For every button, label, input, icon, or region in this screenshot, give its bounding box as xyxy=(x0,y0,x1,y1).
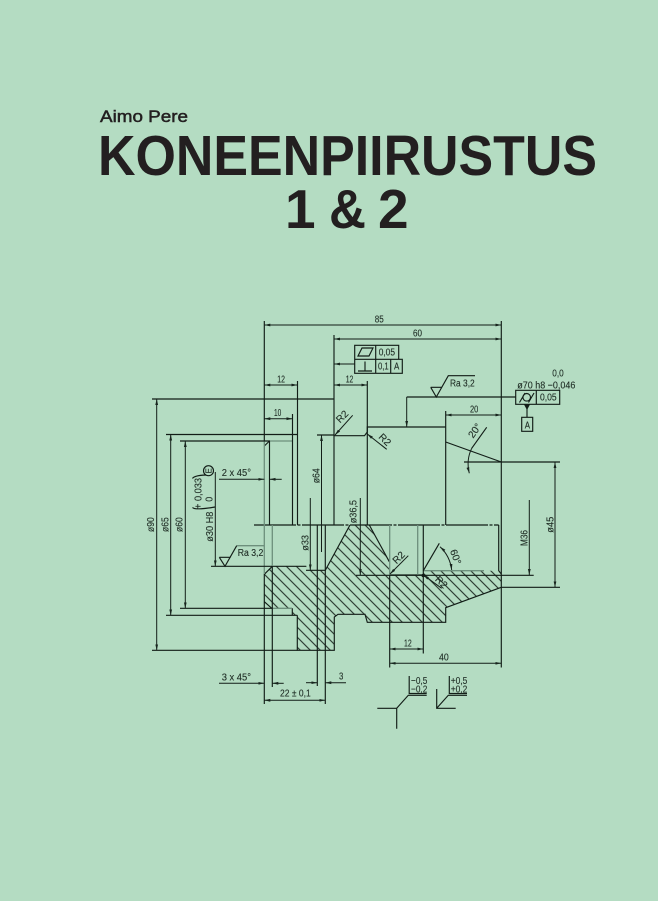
angled radius and angle labels: R2 xyxy=(334,409,351,426)
subtitle: 1 & 2 xyxy=(285,178,409,240)
horizontal dimension labels: 60 xyxy=(413,329,422,340)
horizontal dimension labels: 40 xyxy=(439,653,449,664)
edge symbol left xyxy=(377,675,427,729)
horizontal dimension labels: 85 xyxy=(375,315,384,326)
angled radius and angle labels: R2 xyxy=(432,574,449,591)
horizontal dimension labels: 2 x 45° xyxy=(222,468,251,479)
edge symbol left: −0,5 xyxy=(411,675,427,687)
edge symbol right: +0,2 xyxy=(451,684,467,696)
vertical dimension labels xyxy=(146,468,556,551)
radius and angle leaders xyxy=(335,415,487,588)
cylindricity frame with datum A xyxy=(516,369,576,431)
flatness and perpendicularity frame: 0,1 xyxy=(378,362,389,373)
cylindricity frame with datum A: 0,0 xyxy=(552,369,564,380)
cylindricity frame with datum A: 0,05 xyxy=(540,392,557,403)
horizontal dimension labels: 12 xyxy=(404,639,412,650)
surface symbol Ra 3,2 lower: Ra 3,2 xyxy=(238,548,264,559)
horizontal dimension labels: 22 ± 0,1 xyxy=(280,689,311,700)
horizontal dimension labels: 12 xyxy=(277,375,285,386)
author name: Aimo Pere xyxy=(100,107,188,126)
vertical dimension labels: ø90 xyxy=(146,517,157,532)
tolerance bracket and envelope symbol xyxy=(192,466,215,509)
title: KONEENPIIRUSTUS xyxy=(98,124,597,187)
extension lines xyxy=(152,321,560,704)
angled radius and angle labels: R2 xyxy=(376,432,393,449)
horizontal dimension labels xyxy=(222,315,479,700)
edge symbol left: −0,2 xyxy=(411,684,427,696)
vertical dimension labels: 0 xyxy=(204,496,216,502)
flatness and perpendicularity frame: 0,05 xyxy=(379,347,395,358)
flatness and perpendicularity frame xyxy=(355,345,402,373)
horizontal dimension labels: 3 x 45° xyxy=(222,672,251,683)
technical drawing xyxy=(146,315,576,729)
vertical dimension labels: ø65 xyxy=(160,517,172,532)
edge symbol right: +0,5 xyxy=(451,675,467,687)
angled radius and angle labels: R2 xyxy=(391,550,408,567)
vertical dimension labels: ø30 H8 xyxy=(205,511,216,542)
angled radius and angle labels: 20° xyxy=(467,422,484,440)
vertical dimension labels: ø45 xyxy=(545,516,556,533)
horizontal dimension labels: 20 xyxy=(470,405,479,416)
hidden / grey edge lines xyxy=(237,441,484,608)
vertical dimension labels: ø60 xyxy=(175,517,186,532)
angled radius and angle labels: 60° xyxy=(447,548,463,566)
dimension lines xyxy=(157,325,555,700)
hatched section of the part xyxy=(264,525,501,650)
subtitle: 1 & 2: 2 xyxy=(378,178,409,240)
vertical dimension labels: ø64 xyxy=(311,468,322,483)
subtitle: 1 & 2: 1 xyxy=(285,178,316,240)
part outline xyxy=(254,427,501,650)
vertical dimension labels: ø36,5 xyxy=(349,500,360,523)
cylindricity frame with datum A: A xyxy=(525,420,530,431)
edge symbol right xyxy=(437,675,467,708)
vertical dimension labels: + 0,033 xyxy=(194,478,204,509)
cylindricity frame with datum A: ø70 h8 −0,046 xyxy=(517,381,576,392)
tolerance bracket and envelope symbol: E xyxy=(204,468,214,474)
horizontal dimension labels: 10 xyxy=(274,408,282,419)
angled radius and angle labels xyxy=(334,409,484,591)
surface symbol Ra 3,2 upper xyxy=(431,376,475,397)
surface symbol Ra 3,2 upper: Ra 3,2 xyxy=(450,378,475,389)
horizontal dimension labels: 12 xyxy=(346,375,354,386)
subtitle: 1 & 2: & xyxy=(329,178,366,240)
vertical dimension labels: ø33 xyxy=(300,535,311,551)
vertical dimension labels: M36 xyxy=(519,530,530,546)
horizontal dimension labels: 3 xyxy=(339,672,344,683)
surface symbol Ra 3,2 lower xyxy=(219,546,264,566)
flatness and perpendicularity frame: A xyxy=(394,362,400,373)
